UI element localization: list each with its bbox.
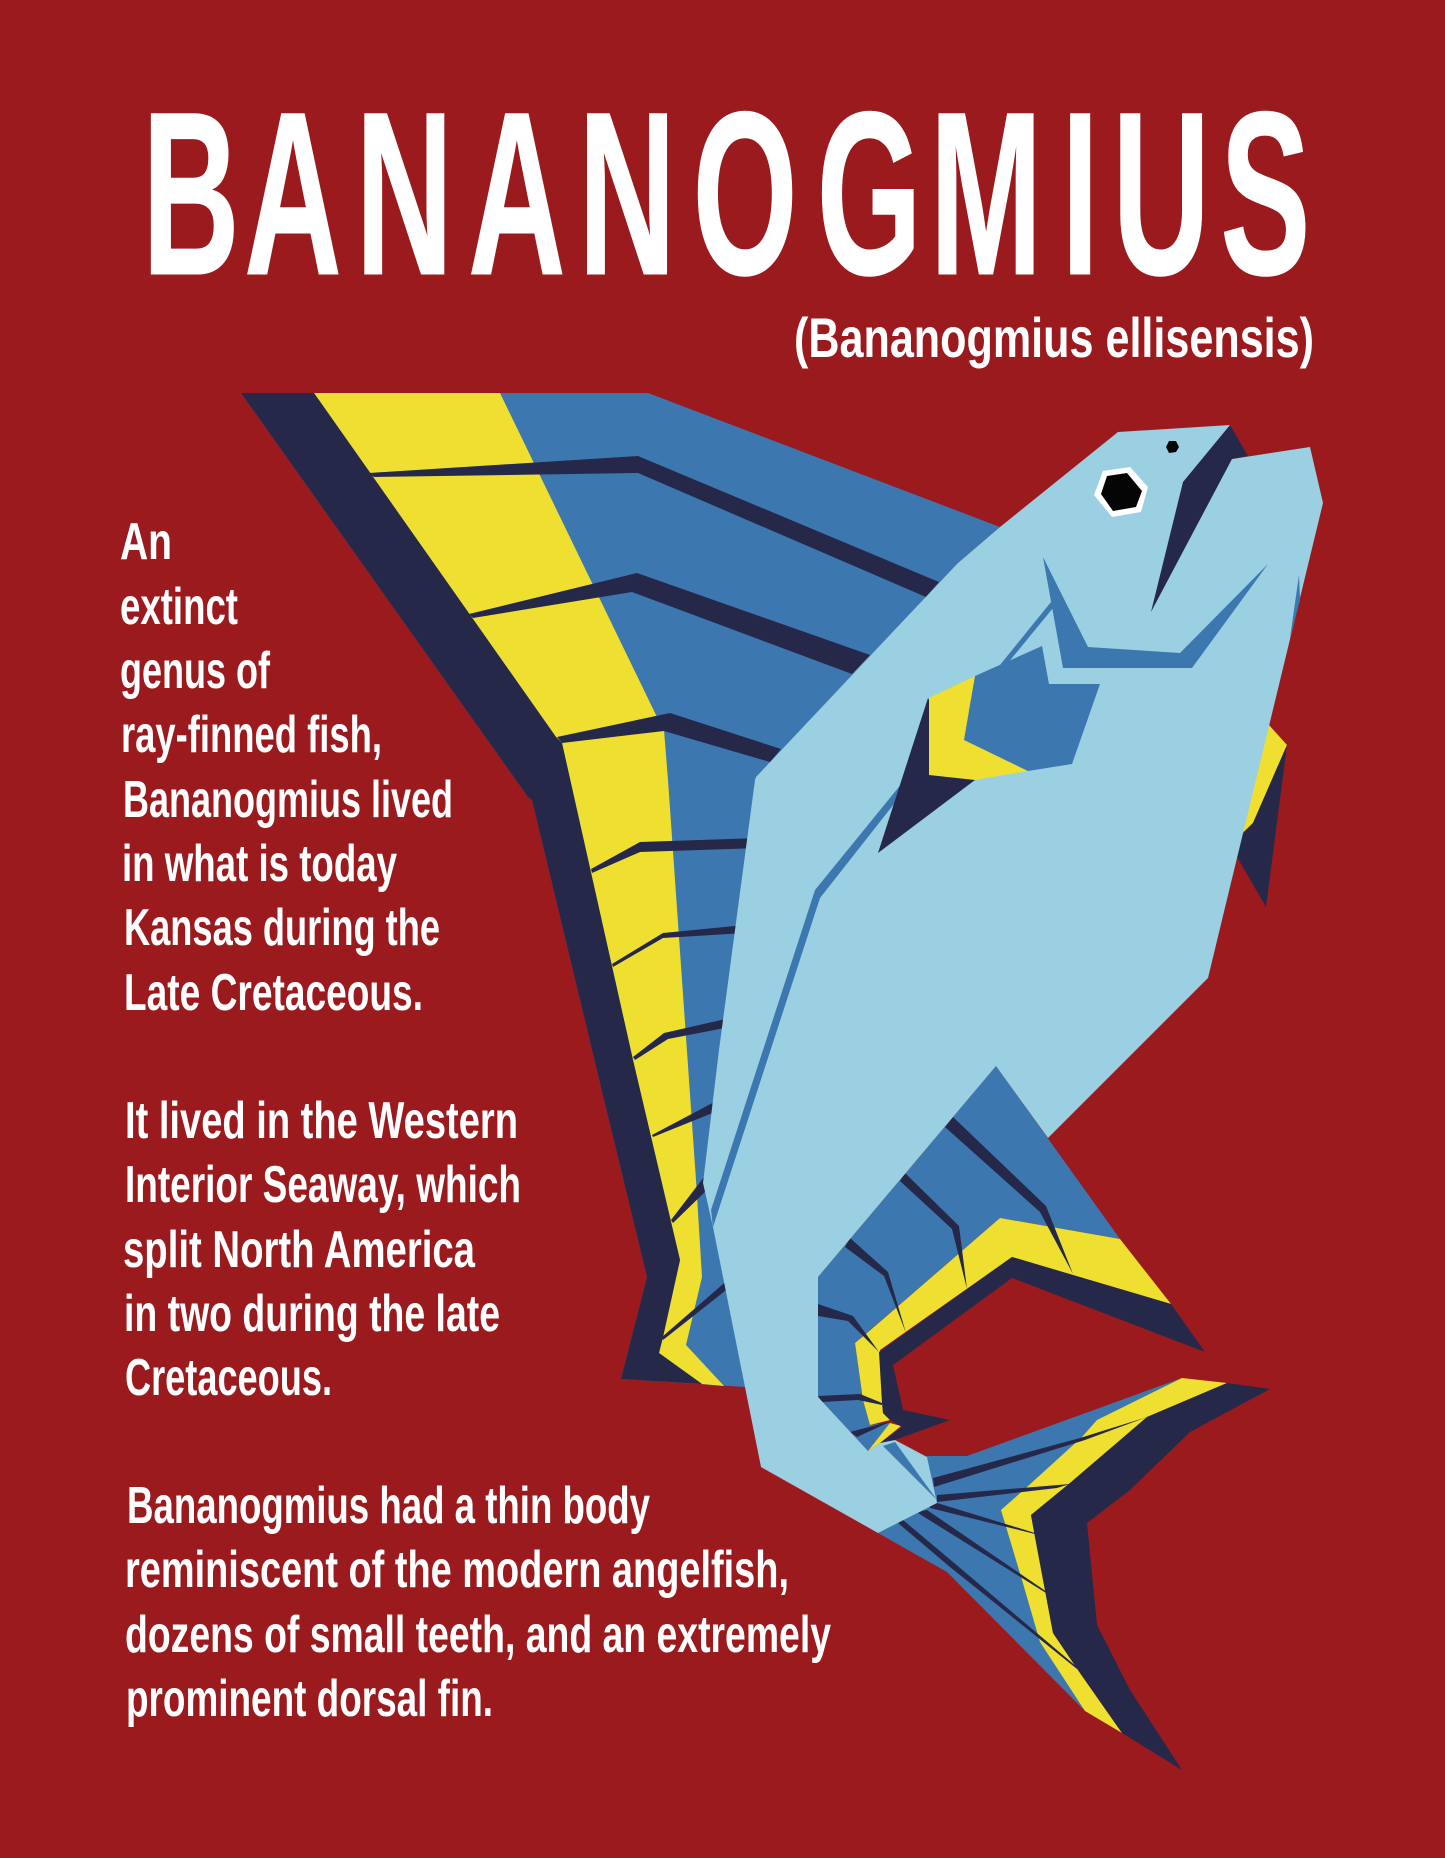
icon: eye: [1094, 467, 1148, 517]
lateral line: [711, 602, 1053, 1227]
text block: anatomy: prominent dorsal fin.: [126, 1670, 493, 1728]
dorsal fin: [241, 393, 1000, 1387]
text block: anatomy: dozens of small teeth, and an extremely: [125, 1606, 831, 1664]
text block: habitat: split North America: [123, 1221, 476, 1279]
text block: habitat: Cretaceous.: [125, 1349, 332, 1407]
icon: nostril: [1166, 441, 1179, 453]
jaw sliver: [1290, 575, 1300, 638]
text block: intro: extinct: [120, 578, 238, 636]
body: [703, 425, 1323, 1533]
text block: intro: Kansas during the: [124, 899, 440, 957]
right-side fin: [1230, 715, 1287, 907]
text block: intro: genus of: [120, 642, 270, 700]
pectoral fin: [878, 646, 1100, 853]
text block: habitat: Interior Seaway, which: [125, 1156, 521, 1214]
mouth: [1151, 425, 1248, 612]
gill line: [1043, 557, 1268, 668]
illustration: fish: [241, 393, 1323, 1770]
text block: intro: ray-finned fish,: [121, 706, 382, 764]
text block: intro: Late Cretaceous.: [124, 964, 423, 1022]
text block: anatomy: [125, 1477, 831, 1728]
text block: anatomy: Bananogmius had a thin body: [127, 1477, 650, 1535]
blue wedge at tail base: [883, 1442, 937, 1500]
text block: intro: An: [120, 513, 172, 571]
anal fin: [818, 1066, 1205, 1451]
text block: intro: in what is today: [122, 835, 397, 893]
text block: habitat: It lived in the Western: [125, 1092, 518, 1150]
text block: anatomy: reminiscent of the modern angelfish,: [125, 1541, 789, 1599]
text block: intro: [120, 513, 453, 1022]
text block: intro: Bananogmius lived: [123, 771, 453, 829]
text block: habitat: [123, 1092, 521, 1407]
title: BANANOGMIUS: [142, 65, 1310, 324]
text block: habitat: in two during the late: [124, 1285, 500, 1343]
tail fin: [878, 1378, 1270, 1770]
